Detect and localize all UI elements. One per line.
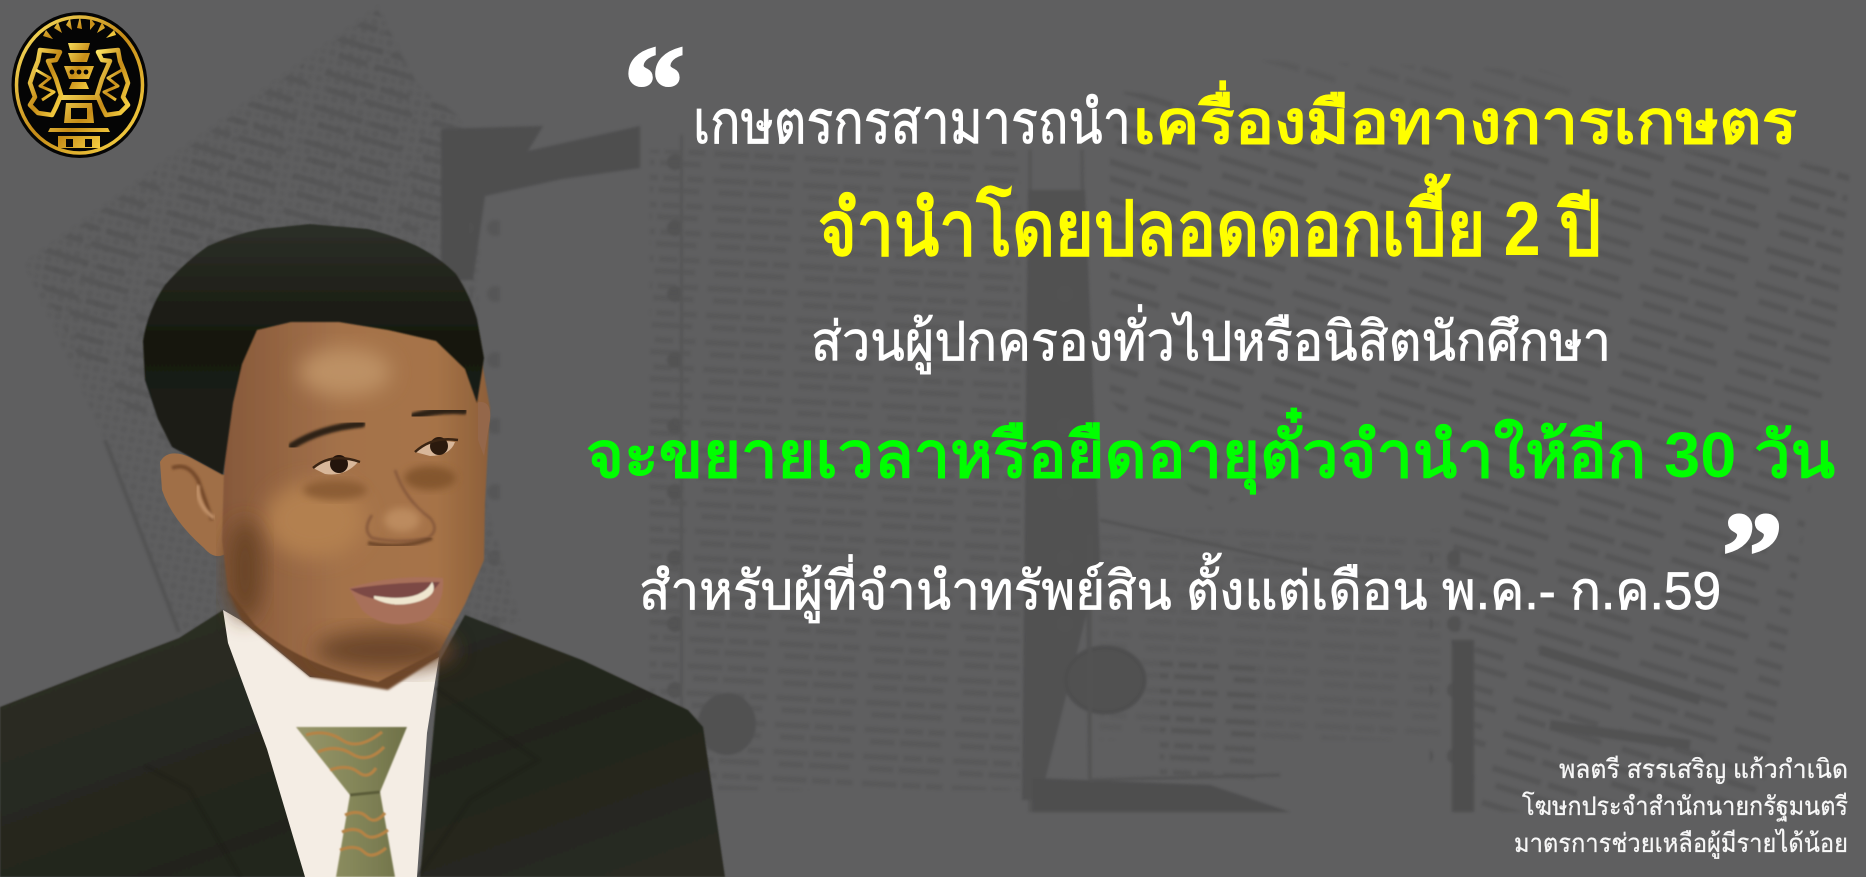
mouth: [349, 577, 443, 624]
face shading: [227, 348, 456, 670]
halftone document, left: [24, 6, 520, 650]
stamp: left ticket: [698, 693, 756, 755]
heading line 4: จะขยายเวลาหรือยืดอายุตั๋วจำนำให้อีก 30 วัน: [586, 407, 1835, 495]
seal: guardian lion, left: [30, 50, 61, 115]
text line 5: สำหรับผู้ที่จำนำทรัพย์สิน ตั้งแต่เดือน พ.ค.- ก.ค.59: [639, 553, 1721, 623]
quote mark: opening: “: [624, 22, 685, 157]
bottom strip: [1032, 778, 1290, 812]
heading line 1: yellow part: เครื่องมือทางการเกษตร: [1133, 80, 1797, 156]
icon: government seal: [12, 12, 148, 158]
heading line 1: white part: เกษตรกรสามารถนำ: [693, 89, 1131, 156]
right ear sliver: [478, 402, 490, 456]
neck shadow: [228, 590, 439, 690]
jacket lapels: [145, 688, 538, 877]
tie: [296, 727, 407, 877]
face: [222, 304, 490, 682]
dark torn strip: [441, 126, 640, 280]
quote mark: closing: ”: [1722, 488, 1783, 623]
portrait: spokesman in dark suit: [0, 224, 725, 877]
dark vertical strip between tickets: [1022, 190, 1100, 800]
heading line 2: จำนำโดยปลอดดอกเบี้ย 2 ปี: [818, 173, 1601, 272]
eyes: [313, 437, 458, 474]
right ticket: [1110, 90, 1850, 812]
ear: [160, 453, 230, 556]
text line 3: ส่วนผู้ปกครองทั่วไปหรือนิสิตนักศึกษา: [811, 304, 1611, 374]
nose: [367, 470, 435, 546]
stamp: centre ticket: [1066, 648, 1144, 712]
seal: guardian lion, right: [97, 50, 128, 115]
hair: [143, 224, 484, 475]
centre ticket: [650, 150, 1020, 790]
attribution: [1514, 754, 1848, 859]
suit jacket: [0, 610, 725, 877]
shirt: [223, 610, 439, 877]
eyebrows: [292, 411, 464, 446]
attribution: name: พลตรี สรรเสริญ แก้วกำเนิด: [1559, 754, 1848, 784]
